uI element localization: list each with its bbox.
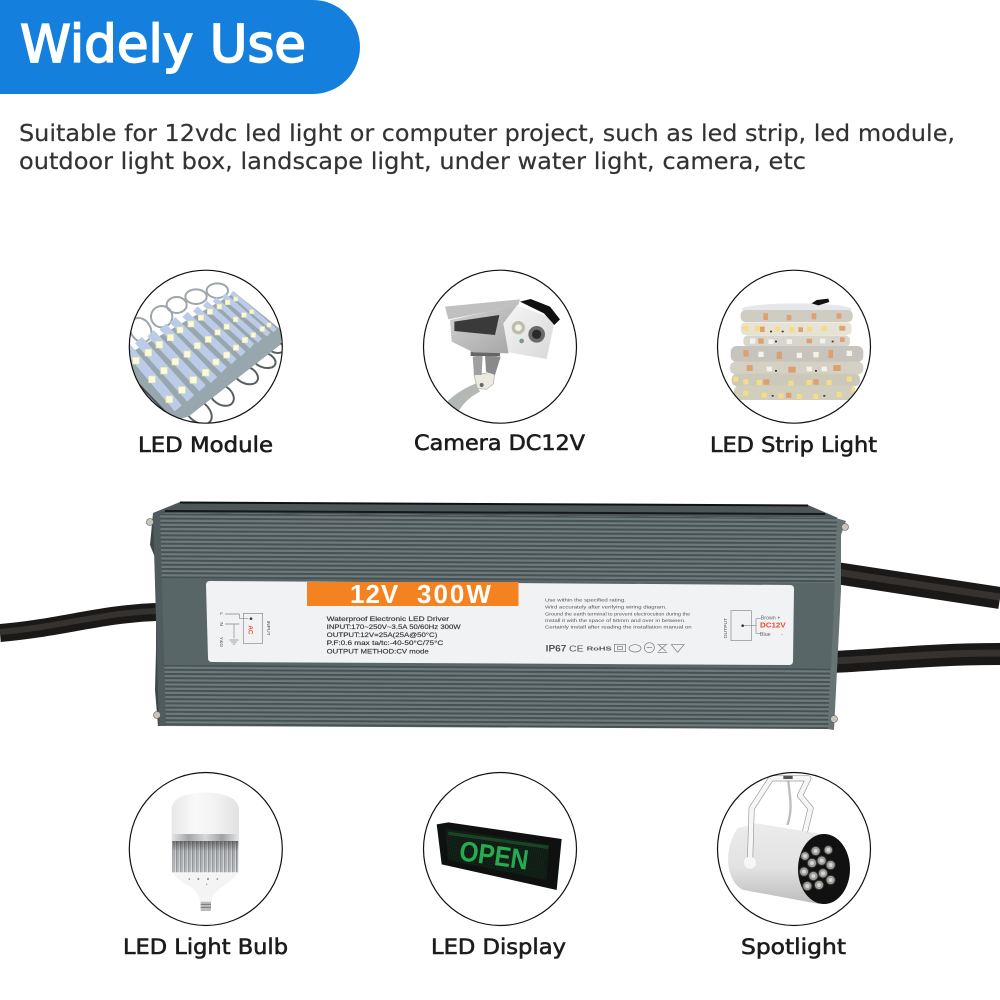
item: Spotlight (718, 772, 870, 959)
output wiring diagram: Brown + (761, 615, 780, 621)
orange badge (307, 579, 518, 609)
input wiring diagram: AC (247, 625, 254, 635)
intro text: outdoor light box, landscape light, under water light, camera, etc (19, 149, 806, 175)
cable: right upper output (836, 572, 1000, 598)
input wiring diagram: INPUT (265, 621, 271, 636)
usage notes: Ground the earth terminal to prevent electrocution during the (545, 611, 690, 617)
icon ring (718, 772, 870, 926)
spec text left: OUTPUT:12V=25A(25A@50°C) (327, 631, 437, 639)
icon: security camera (445, 299, 560, 412)
item: LED Light Bulb (123, 772, 288, 959)
output wiring diagram: OUTPUT (723, 618, 729, 638)
input wiring diagram: L (218, 612, 224, 615)
icon: LED module photo (126, 283, 286, 429)
title banner (0, 0, 360, 94)
certification marks (546, 643, 684, 654)
icon ring (129, 270, 282, 423)
usage notes: Certainly install after reading the installation manual on (545, 625, 692, 631)
input wiring diagram: N (218, 622, 224, 626)
output wiring diagram: - (781, 632, 783, 638)
module strips backing (127, 293, 283, 423)
item: Camera DC12V (414, 270, 586, 455)
spec text left: Waterproof Electronic LED Driver (327, 616, 449, 623)
label: LED Display (431, 935, 566, 959)
icon: OPEN LED sign: OPEN (457, 835, 530, 876)
orange badge: 12V (350, 579, 399, 609)
input wiring diagram (218, 612, 271, 647)
power supply unit (146, 502, 848, 730)
usage notes: Use within the specified rating. (545, 598, 626, 604)
spec text left: P.F:0.6 max ta/tc:-40-50°C/75°C (327, 639, 444, 647)
output wiring diagram: Blue (760, 632, 771, 638)
orange badge: 300W (417, 579, 493, 609)
input wiring diagram: Y&G (218, 637, 224, 647)
icon ring (424, 270, 576, 423)
usage notes: Wird accurately after verifying wiring diagram. (545, 605, 667, 611)
icon ring (718, 270, 870, 423)
certification marks: IP67 (546, 644, 566, 654)
label: LED Strip Light (710, 433, 877, 457)
label: LED Light Bulb (123, 935, 288, 959)
icon: LED strip reels (730, 299, 863, 400)
item: LED Strip Light (710, 270, 877, 457)
icon ring (424, 772, 576, 926)
usage notes: Install it with the space of 50mm and over in between. (545, 618, 686, 624)
left margin (153, 513, 166, 726)
certification marks: CE (569, 644, 584, 654)
output wiring diagram (723, 611, 786, 641)
usage notes (545, 598, 692, 631)
label: Spotlight (741, 935, 846, 959)
label: Camera DC12V (414, 431, 586, 455)
certification marks: RoHS (587, 647, 612, 653)
smooth label band (157, 578, 835, 668)
title banner: Widely Use (20, 15, 306, 75)
spec text left (327, 616, 461, 655)
top face (153, 502, 838, 518)
intro text: Suitable for 12vdc led light or computer project, such as led strip, led module, (19, 121, 955, 147)
icon: OPEN LED sign (437, 822, 562, 890)
icon ring (129, 772, 282, 926)
cable: left input (0, 611, 156, 633)
icon: high-bay LED bulb (172, 792, 239, 911)
left end notches (150, 513, 170, 726)
item: LED Module (126, 270, 286, 457)
right end face (827, 518, 846, 730)
spec text left: OUTPUT METHOD:CV mode (327, 648, 429, 655)
icon: track spotlight (728, 776, 850, 904)
label: LED Module (138, 433, 273, 457)
item: LED Display (424, 772, 576, 959)
front face with ribs (155, 513, 837, 729)
spec text left: INPUT:170~250V~3.5A 50/60Hz 300W (327, 624, 461, 631)
screws (146, 518, 848, 722)
intro text (19, 121, 955, 175)
cable: right lower output (832, 653, 1000, 662)
output wiring diagram: DC12V (760, 623, 786, 630)
white spec label (206, 581, 794, 665)
